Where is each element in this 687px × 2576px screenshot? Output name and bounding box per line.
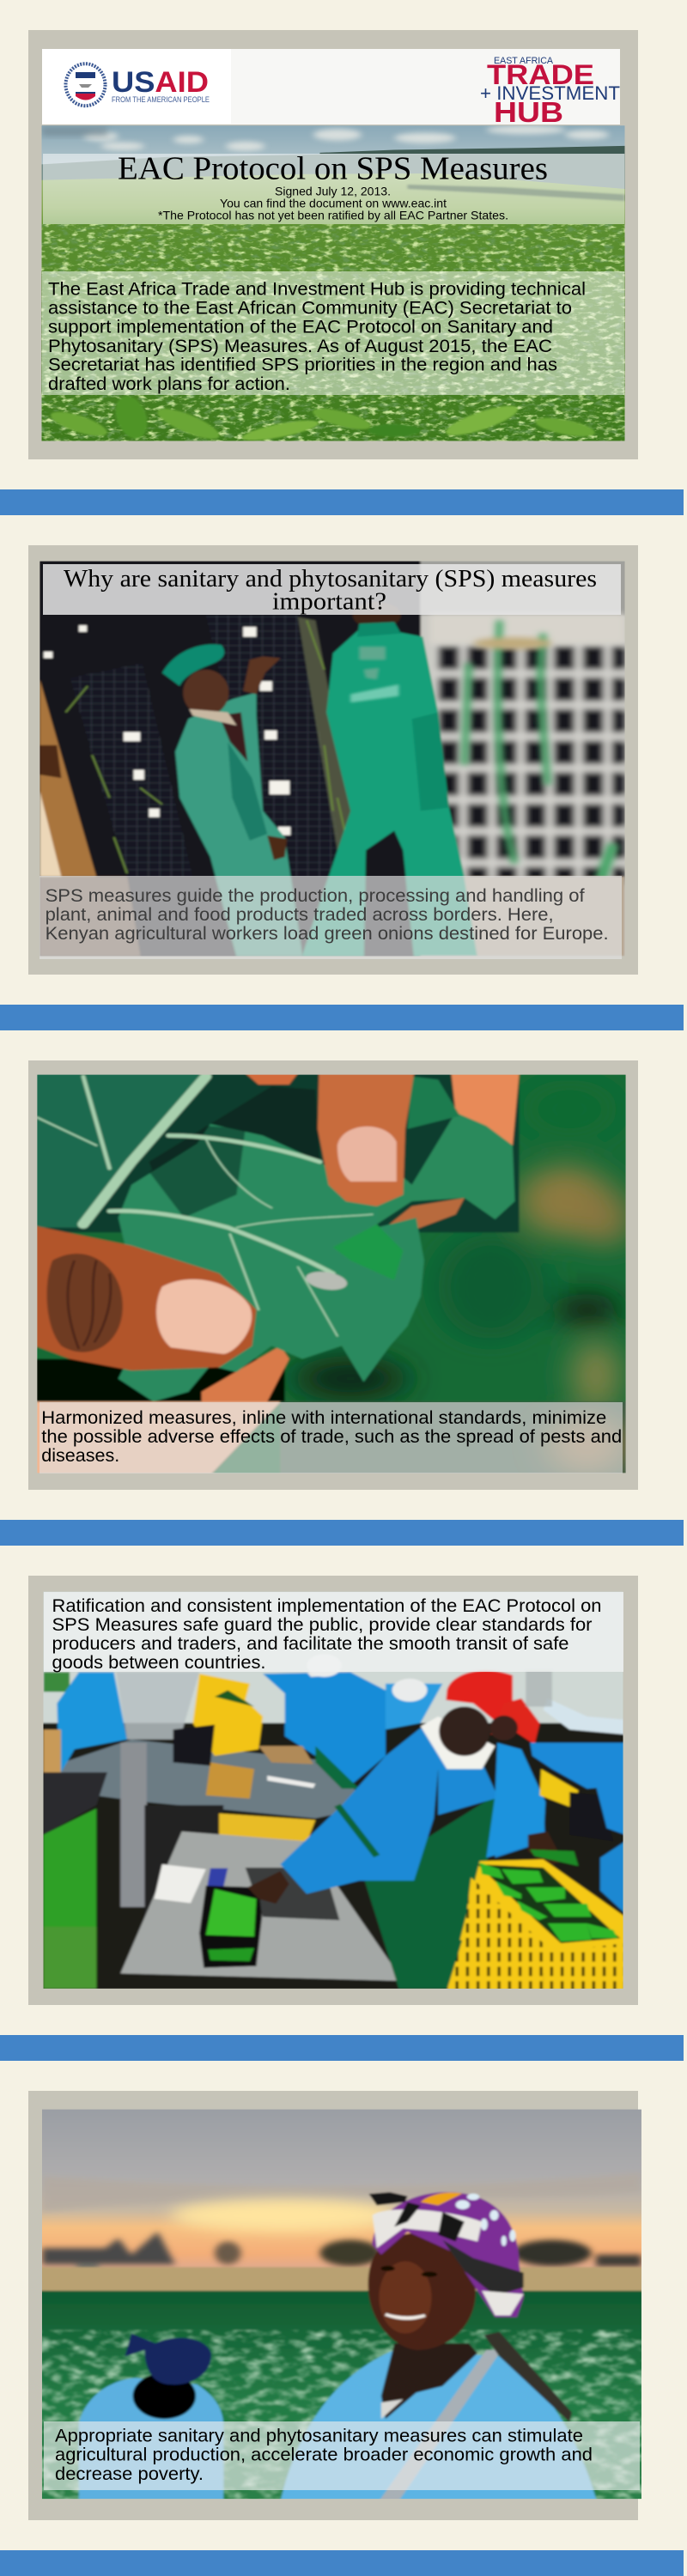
panel: grey frame <box>28 30 638 459</box>
text block: ratification: producers and traders, and facilitate the smooth transit of safe <box>52 1634 568 1654</box>
logo: East Africa Trade + Investment Hub <box>480 56 620 128</box>
divider band <box>0 2035 684 2061</box>
heading: important? <box>272 588 386 616</box>
signing note: *The Protocol has not yet been ratified by all EAC Partner States. <box>158 208 508 222</box>
heading: EAC Protocol on SPS Measures <box>118 151 548 187</box>
caption: Harmonized measures, inline with international standards, minimize <box>41 1407 606 1427</box>
caption: Appropriate sanitary and phytosanitary measures can stimulate <box>55 2426 583 2445</box>
photo: tea field <box>41 125 625 441</box>
logo: East Africa Trade + Investment Hub: + INVESTMENT <box>480 82 620 104</box>
section: why SPS measures are important <box>0 545 684 1030</box>
text block: technical assistance: Phytosanitary (SPS) Measures. As of August 2015, the EAC <box>48 337 552 356</box>
text block: technical assistance <box>42 271 624 395</box>
text block: technical assistance: The East Africa Trade and Investment Hub is providing technical <box>48 280 586 300</box>
section: ratification <box>0 1576 684 2061</box>
caption <box>40 1401 622 1473</box>
photo: hands holding a leaf with a pest <box>37 1075 626 1473</box>
text block: ratification: goods between countries. <box>52 1653 265 1673</box>
caption <box>44 2421 640 2490</box>
caption: the possible adverse effects of trade, such as the spread of pests and <box>41 1427 622 1446</box>
logo: East Africa Trade + Investment Hub: HUB <box>494 96 563 128</box>
text block: technical assistance: Secretariat has identified SPS priorities in the region and has <box>48 355 557 375</box>
photo: workers packing green beans <box>43 1592 623 1989</box>
text block: technical assistance: support implementation of the EAC Protocol on Sanitary and <box>48 318 553 337</box>
signing note: Signed July 12, 2013. <box>275 185 391 198</box>
divider band <box>0 2550 684 2576</box>
text block: technical assistance: assistance to the East African Community (EAC) Secretariat to <box>48 299 572 318</box>
signing note <box>158 185 508 222</box>
logo: USAID: USAID <box>112 66 209 99</box>
logo: East Africa Trade + Investment Hub: EAST AFRICA <box>494 56 554 66</box>
heading <box>43 564 621 615</box>
panel: grey frame <box>28 1576 638 2005</box>
section: harmonized measures <box>0 1060 684 1546</box>
signing note: You can find the document on www.eac.int <box>220 196 447 210</box>
heading: Why are sanitary and phytosanitary (SPS) measures <box>64 566 597 593</box>
divider band <box>0 489 684 515</box>
logo: East Africa Trade + Investment Hub: TRADE <box>487 59 594 90</box>
caption: plant, animal and food products traded across borders. Here, <box>46 905 554 925</box>
caption: decrease poverty. <box>55 2464 204 2484</box>
text block: technical assistance: drafted work plans for action. <box>48 374 290 394</box>
divider band <box>0 1005 684 1030</box>
section: EAC protocol overview <box>0 30 684 515</box>
text block: ratification: Ratification and consistent implementation of the EAC Protocol on <box>52 1596 601 1616</box>
logo: USAID <box>42 49 231 124</box>
section: economic benefits <box>0 2091 684 2576</box>
divider band <box>0 1520 684 1546</box>
logo: USAID: FROM THE AMERICAN PEOPLE <box>112 95 210 104</box>
caption <box>40 876 622 959</box>
panel: grey frame <box>28 1060 638 1490</box>
photo: workers loading green onions <box>40 562 625 957</box>
text block: ratification: SPS Measures safe guard the public, provide clear standards for <box>52 1615 592 1635</box>
caption: agricultural production, accelerate broader economic growth and <box>55 2445 593 2465</box>
title block <box>43 154 624 224</box>
logo bar <box>42 49 620 125</box>
panel: grey frame <box>28 2091 638 2520</box>
caption: SPS measures guide the production, processing and handling of <box>46 886 585 906</box>
text block: ratification <box>43 1592 623 1672</box>
photo: farmer in a field at sunset <box>42 2109 641 2499</box>
caption: Kenyan agricultural workers load green onions destined for Europe. <box>46 924 609 944</box>
caption: diseases. <box>41 1446 119 1466</box>
panel: grey frame <box>28 545 638 975</box>
